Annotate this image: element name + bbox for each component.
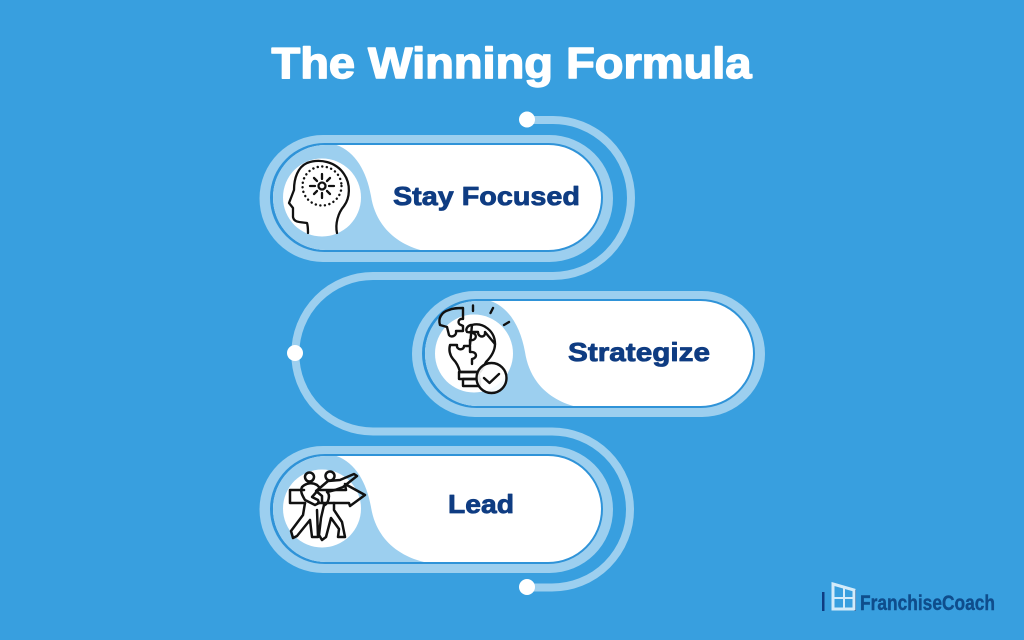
icon: puzzle lightbulb with check — [439, 306, 509, 393]
label: Stay Focused: Stay Focused — [393, 181, 580, 211]
title: The Winning Formula — [272, 39, 752, 88]
icon: head with target — [289, 161, 349, 233]
panel: Stay Focused — [260, 135, 613, 262]
panel: Strategize — [412, 291, 765, 417]
connector path — [287, 112, 631, 595]
dot: path middle — [287, 345, 303, 361]
icon: two figures carrying an arrow — [290, 472, 365, 540]
dot: path end — [519, 579, 535, 595]
logo text: FranchiseCoach — [860, 592, 995, 615]
label: Strategize: Strategize — [568, 337, 710, 367]
panel: Lead — [260, 446, 613, 573]
icon: window — [822, 584, 855, 611]
dot: path start — [519, 112, 535, 128]
logo: FranchiseCoach — [822, 584, 995, 615]
label: Lead: Lead — [448, 489, 514, 519]
